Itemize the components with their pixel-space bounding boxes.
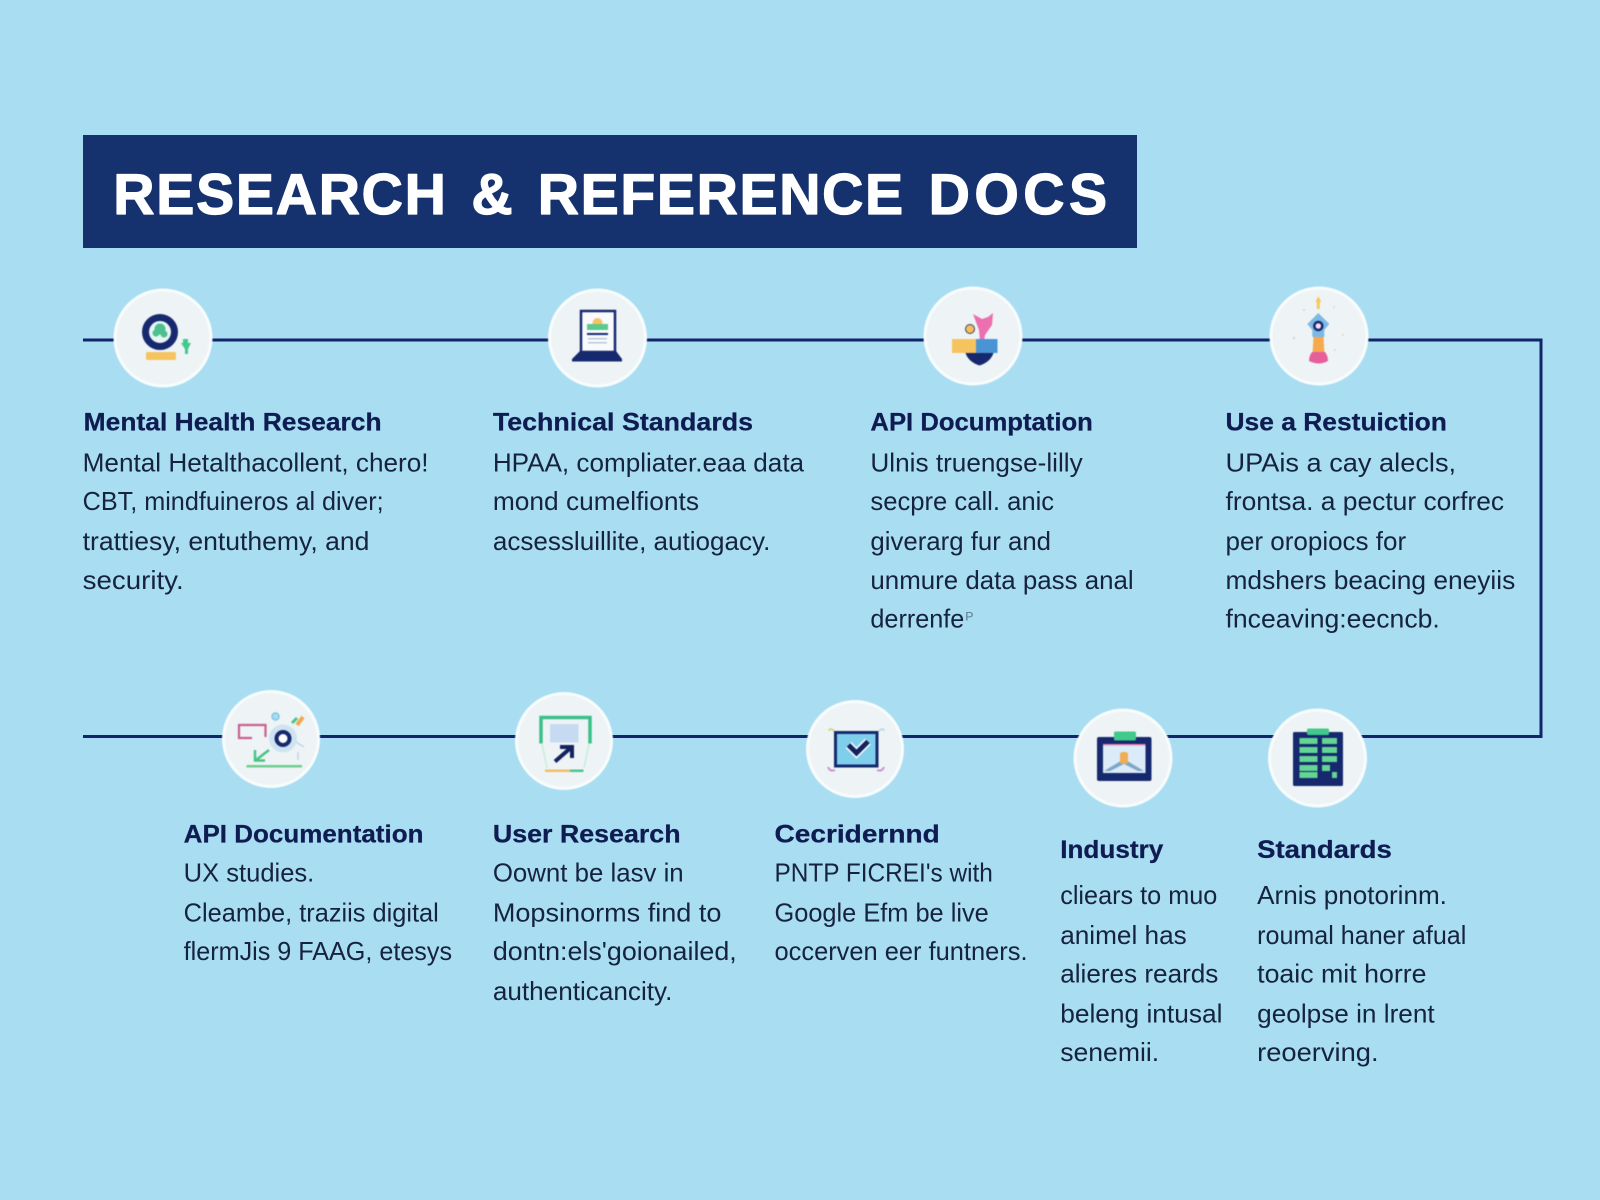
text: api documptation [870,409,1134,634]
body: cliears to muo [1060,882,1217,910]
body [83,449,429,595]
body: trattiesy, entuthemy, and [83,528,369,556]
heading: Mental Health Research [84,409,382,437]
body: alieres reards [1060,961,1218,989]
heading: Industry [1060,836,1163,864]
icon: mental health research [114,288,212,388]
heading: User Research [493,820,681,848]
heading: API Documentation [184,820,423,848]
body: UX studies. [184,860,314,888]
text: user research [493,820,737,1006]
text: technical standards [493,409,805,556]
body: fnceaving:eecncb. [1226,606,1440,634]
text: standards [1257,836,1466,1067]
icon: user research [515,692,613,790]
body: Ulnis truengse-lilly [870,449,1083,477]
icon: use a restuiction [1270,286,1368,386]
icon: technical standards [548,288,647,388]
title: & [471,163,513,227]
body: P [965,609,973,623]
body [493,860,737,1006]
heading: Standards [1257,836,1392,864]
body: Google Efm be live [774,899,989,927]
body [774,860,1028,966]
body: UPAis a cay alecls, [1226,449,1456,477]
text: industry [1060,836,1222,1067]
body: derrenfe [870,606,964,634]
heading: Cecridernnd [774,820,940,848]
body: giverarg fur and [870,528,1051,556]
body: unmure data pass anal [870,567,1134,595]
body: beleng intusal [1060,1000,1222,1028]
icon: industry [1074,708,1172,808]
heading: Technical Standards [493,409,753,437]
title: DOCS [929,163,1107,227]
body: toaic mit horre [1257,961,1427,989]
body [184,860,452,966]
body: Mental Hetalthacollent, chero! [83,449,429,477]
text: use a restuiction [1226,409,1515,634]
title: RESEARCH [113,163,446,227]
body: roumal haner afual [1257,922,1466,950]
body: per oropiocs for [1226,528,1407,556]
body: security. [83,567,184,595]
body: mond cumelfionts [493,488,699,516]
body: PNTP FICREI's with [774,860,993,888]
body: dontn:els'goionailed, [493,938,737,966]
body: acsessluillite, autiogacy. [493,528,770,556]
body [493,449,805,556]
body [870,449,1134,634]
body: authenticancity. [493,978,672,1006]
icon: standards [1268,708,1367,808]
heading: API Documptation [870,409,1093,437]
body: flermJis 9 FAAG, etesys [184,938,452,966]
text: cecridernnd [774,820,1028,966]
text: mental health research [83,409,429,595]
text: api documentation [184,820,452,966]
body: mdshers beacing eneyiis [1226,567,1515,595]
body: geolpse in lrent [1257,1000,1435,1028]
icon: api documptation [924,286,1022,386]
body: Mopsinorms find to [493,899,721,927]
body: Oownt be lasv in [493,860,684,888]
icon: api documentation [222,690,320,788]
body: secpre call. anic [870,488,1054,516]
body: HPAA, compliater.eaa data [493,449,805,477]
body [1060,882,1222,1067]
icon: cecridernnd [806,700,904,798]
body: senemii. [1060,1039,1159,1067]
body: CBT, mindfuineros al diver; [83,488,384,516]
body [1257,882,1466,1067]
title banner [83,135,1137,248]
body: Cleambe, traziis digital [184,899,439,927]
body: frontsa. a pectur corfrec [1226,488,1504,516]
body: reoerving. [1257,1039,1379,1067]
heading: Use a Restuiction [1226,409,1447,437]
body: Arnis pnotorinm. [1257,882,1447,910]
title [113,163,1107,227]
body [1226,449,1515,634]
body: animel has [1060,922,1187,950]
body: occerven eer funtners. [774,938,1028,966]
title: REFERENCE [538,163,903,227]
timeline connector line [83,340,1541,736]
